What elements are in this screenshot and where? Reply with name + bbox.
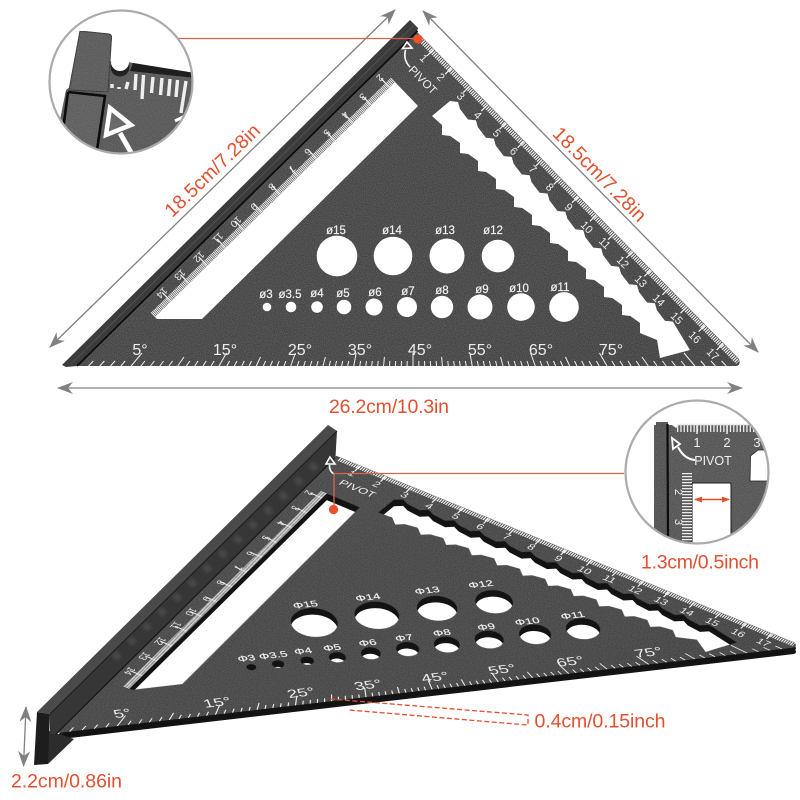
right scale numbers: 5 [449,512,462,521]
right scale numbers: 6 [473,522,487,532]
hole size labels: Φ5 [322,643,343,654]
right scale numbers: 15 [702,616,722,628]
right scale numbers: 16 [728,627,748,639]
right scale numbers: 8 [543,181,556,194]
dimension label: window width: 1.3cm/0.5inch [641,552,759,574]
inset: fence and window detail: 2 [672,489,684,495]
hole size labels: Φ15 [291,599,320,611]
right scale numbers: 1 [345,469,358,479]
dimension arrow: left edge [50,10,395,347]
degree labels: 45° [419,670,451,685]
hole size labels: ø4 [310,288,324,300]
right scale numbers: 12 [625,584,645,596]
right scale numbers: 13 [651,595,671,607]
hole size labels: ø10 [509,283,529,295]
right scale numbers: 3 [454,90,467,103]
left scale numbers [53,487,382,678]
right scale numbers: 14 [677,606,696,618]
right scale numbers [417,52,721,363]
right scale numbers [342,430,776,687]
pivot label: PIVOT [336,478,378,500]
left scale numbers: 7 [230,563,244,571]
hole size labels: ø5 [336,288,350,300]
pivot arrow [326,457,335,474]
hole size labels [217,570,589,664]
hole size labels: Φ10 [513,616,542,628]
hole size labels: ø13 [435,225,455,237]
inset pivot arrow [106,108,131,135]
inset plate [60,61,192,152]
degree labels: 75° [632,645,665,661]
degree labels: 35° [352,678,384,693]
inset: fence and window detail: 3 [753,435,761,450]
hole size labels: Φ7 [394,633,415,644]
right scale numbers: 8 [524,542,538,552]
left scale numbers: 6 [242,549,257,557]
pivot mark: PIVOT [406,64,439,97]
right scale numbers: 5 [490,127,503,140]
inset left ruler [682,473,692,543]
left scale numbers: 13 [171,266,187,282]
left scale numbers: 4 [338,108,350,120]
hole size labels: ø7 [401,286,415,298]
left scale numbers: 14 [120,665,138,677]
degree labels [111,645,665,721]
inset fence block [69,31,112,92]
left scale numbers: 5 [258,534,273,542]
dimension label: base: 26.2cm/10.3in [329,396,449,418]
inset: notch detail [48,9,194,155]
right scale numbers: 13 [632,273,649,290]
dimension arrow: fence height [24,707,26,766]
hole size labels: ø12 [483,225,503,237]
inset: fence and window detail: 3 [672,519,684,525]
ruler and degree ticks [0,418,795,732]
callout line: top inset to pivot [178,34,423,44]
right scale numbers: 17 [753,637,773,649]
degree labels: 45° [408,342,432,359]
fence [34,425,337,765]
left scale numbers [153,71,385,300]
left scale numbers: 2 [301,488,315,496]
hole size labels: Φ13 [413,585,441,597]
degree labels: 5° [111,707,134,721]
inset width arrow [695,498,729,500]
left scale numbers: 11 [209,230,225,245]
left scale numbers: 10 [227,213,243,229]
degree labels: 65° [529,342,553,359]
fence ridge [62,20,418,367]
hole size labels: Φ4 [293,646,314,657]
main view: top-down square [62,20,740,367]
degree labels: 75° [599,342,623,359]
inset top ruler [677,424,750,426]
right scale numbers: 15 [668,310,685,327]
hole size labels: Φ14 [354,592,382,604]
hole size labels: ø11 [551,282,569,294]
left scale numbers: 11 [166,620,184,630]
hole size labels: Φ9 [476,622,497,633]
degree labels: 55° [468,342,492,359]
degree labels [132,342,623,359]
degree labels: 5° [132,342,148,359]
right scale numbers: 14 [650,292,667,309]
hole size labels: Φ3.5 [257,650,289,662]
right scale numbers: 2 [434,71,447,84]
hole size labels: Φ12 [467,579,495,591]
dimension label: plate thickness: 0.4cm/0.15inch [534,710,666,732]
right scale numbers: 12 [614,254,631,271]
left scale numbers: 12 [190,248,206,264]
hole size labels: ø14 [382,225,403,237]
left scale numbers: 14 [153,284,169,300]
left scale numbers: 7 [285,162,297,174]
dimension label: right edge: 18.5cm/7.28in [548,123,651,227]
right scale numbers: 17 [704,346,721,363]
right scale numbers: 4 [422,501,436,511]
inset ruler ticks [112,74,186,113]
inset pivot label: PIVOT [694,454,732,468]
hole size labels: Φ11 [559,610,587,622]
left scale numbers: 8 [265,180,277,192]
right scale numbers: 4 [471,109,484,122]
dashed callout: plate thickness [330,699,528,725]
hole size labels: ø6 [368,287,382,299]
left scale numbers: 2 [373,71,385,83]
left scale numbers: 9 [247,200,259,212]
hole size labels: ø3.5 [278,289,302,301]
right scale numbers: 3 [398,490,411,500]
left scale numbers: 3 [356,90,368,102]
right scale numbers: 16 [686,329,703,346]
left scale numbers: 4 [272,519,287,527]
pivot mark [402,42,439,97]
degree labels: 15° [201,695,234,711]
inset numbers: 1 [693,435,701,450]
face plate [77,32,740,366]
plate face [0,414,797,733]
right scale numbers: 1 [417,52,430,65]
right scale numbers: 11 [596,235,613,252]
left scale numbers: 3 [287,504,302,512]
degree labels: 35° [348,342,372,359]
inset fence [656,422,668,425]
left scale numbers: 5 [320,126,332,138]
inset: fence and window detail [626,400,772,553]
right scale numbers: 10 [575,564,594,577]
degree labels: 25° [288,342,312,359]
degree labels: 65° [554,654,587,670]
left scale numbers: 6 [301,145,313,157]
ruler and degree ticks [88,37,738,366]
hole size labels: Φ6 [357,638,378,649]
callout line: pivot to bottom inset [329,474,624,514]
inset plate [654,425,772,545]
left scale numbers: 13 [135,650,153,661]
mapped labels and ticks [0,418,795,732]
hole size labels: ø3 [259,289,273,301]
hole size labels: ø15 [326,225,346,237]
right scale numbers: 2 [370,480,383,490]
right scale numbers: 11 [600,573,619,585]
right scale numbers: 7 [500,532,513,542]
hole size labels: Φ3 [236,654,257,664]
right scale numbers: 7 [526,163,539,176]
hole size labels: ø8 [435,285,449,297]
left scale numbers: 10 [181,606,199,617]
dimension label: left edge: 18.5cm/7.28in [160,120,265,222]
perspective view: square on fence [0,414,797,765]
inset window [692,482,732,542]
dimension arrow: base [58,387,742,389]
hole size labels: Φ8 [431,628,453,639]
plate thickness [0,421,797,739]
left scale numbers: 8 [213,579,227,586]
right scale numbers: 6 [507,145,520,158]
left scale numbers: 9 [199,595,213,603]
hole size labels: ø9 [475,284,489,296]
right scale numbers: 10 [578,219,595,236]
degree labels: 15° [213,342,237,359]
dimension label: fence height: 2.2cm/0.86in [11,770,122,792]
inset: fence and window detail: 2 [723,435,731,450]
right scale numbers: 9 [551,554,565,564]
inset slot [750,450,768,482]
hole size labels [259,225,569,301]
right scale numbers: 9 [562,201,575,214]
left scale numbers: 12 [151,635,168,646]
degree labels: 25° [285,685,317,701]
degree labels: 55° [486,662,518,678]
inset pivot arrow [672,438,695,460]
dimension arrow: right edge [423,11,758,352]
